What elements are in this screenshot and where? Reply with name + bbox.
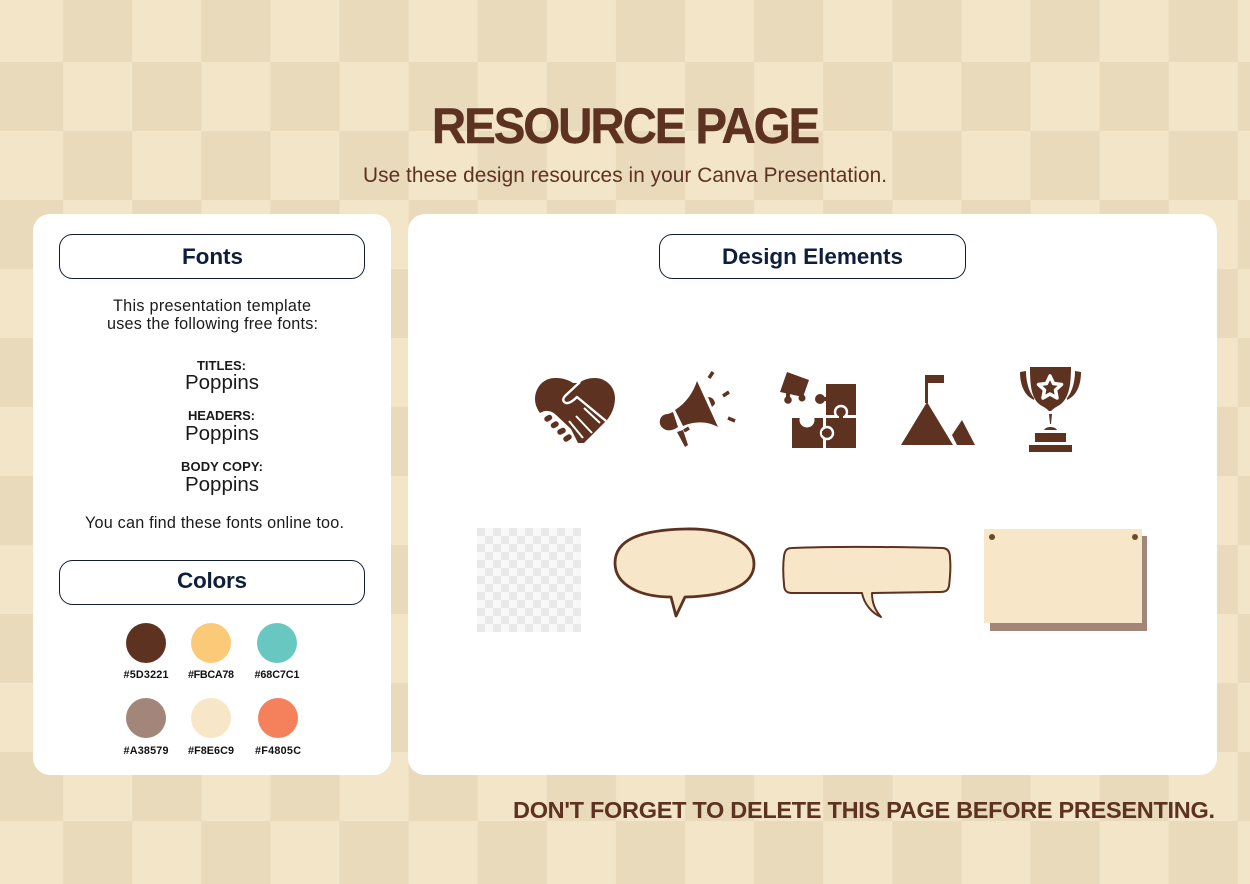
- panel: design elements: [408, 214, 1217, 775]
- heading: fonts: [60, 234, 364, 278]
- swatch: A38579: [124, 698, 168, 757]
- swatch: F4805C: [255, 698, 301, 757]
- pinned note card: [984, 529, 1147, 631]
- text block: headers font: HEADERS:: [188, 408, 255, 423]
- text block: body copy font: Poppins: [185, 473, 259, 496]
- subtitle: Use these design resources in your Canva Presentation.: [363, 164, 887, 187]
- icon: handshake heart: [535, 378, 615, 443]
- text block: titles font: TITLES:: [197, 358, 246, 373]
- heading: colors: Colors: [177, 568, 247, 593]
- text block: body copy font: BODY COPY:: [181, 459, 263, 474]
- transparent checker tile: [477, 528, 581, 632]
- swatch: FBCA78: [188, 623, 234, 681]
- swatch: F8E6C9: [188, 698, 234, 757]
- text block: font intro: This presentation template: [113, 297, 311, 315]
- icon: megaphone: [660, 372, 735, 447]
- heading: colors: [60, 560, 364, 604]
- swatch: 68C7C1: [254, 623, 300, 681]
- text block: body copy font: [181, 459, 263, 496]
- swatch: F8E6C9: #F8E6C9: [188, 745, 234, 757]
- speech bubble: oval: [615, 529, 754, 616]
- swatch: 68C7C1: #68C7C1: [254, 669, 300, 681]
- icon: trophy: [1020, 367, 1081, 452]
- heading: design elements: [660, 234, 966, 278]
- text block: headers font: [185, 408, 259, 445]
- swatch: FBCA78: #FBCA78: [188, 669, 234, 681]
- text block: font intro: uses the following free fonts:: [107, 315, 318, 333]
- speech bubble: rectangle: [783, 547, 950, 617]
- text block: titles font: Poppins: [185, 371, 259, 394]
- swatch: 5D3221: [124, 623, 168, 681]
- panel: fonts and colors: [33, 214, 391, 775]
- text block: fonts note: You can find these fonts online too.: [85, 514, 344, 532]
- icon: mountain with flag: [901, 375, 975, 445]
- text block: titles font: [185, 358, 259, 394]
- title: RESOURCE PAGE: [432, 99, 819, 154]
- icon: puzzle: [780, 372, 856, 448]
- text block: headers font: Poppins: [185, 422, 259, 445]
- heading: fonts: Fonts: [182, 244, 243, 269]
- footer reminder: DON'T FORGET TO DELETE THIS PAGE BEFORE PRESENTING.: [513, 797, 1215, 823]
- swatch: 5D3221: #5D3221: [124, 669, 168, 681]
- text block: font intro: [107, 297, 318, 333]
- swatch: A38579: #A38579: [124, 745, 168, 757]
- heading: design elements: Design Elements: [722, 244, 903, 269]
- swatch: F4805C: #F4805C: [255, 745, 301, 757]
